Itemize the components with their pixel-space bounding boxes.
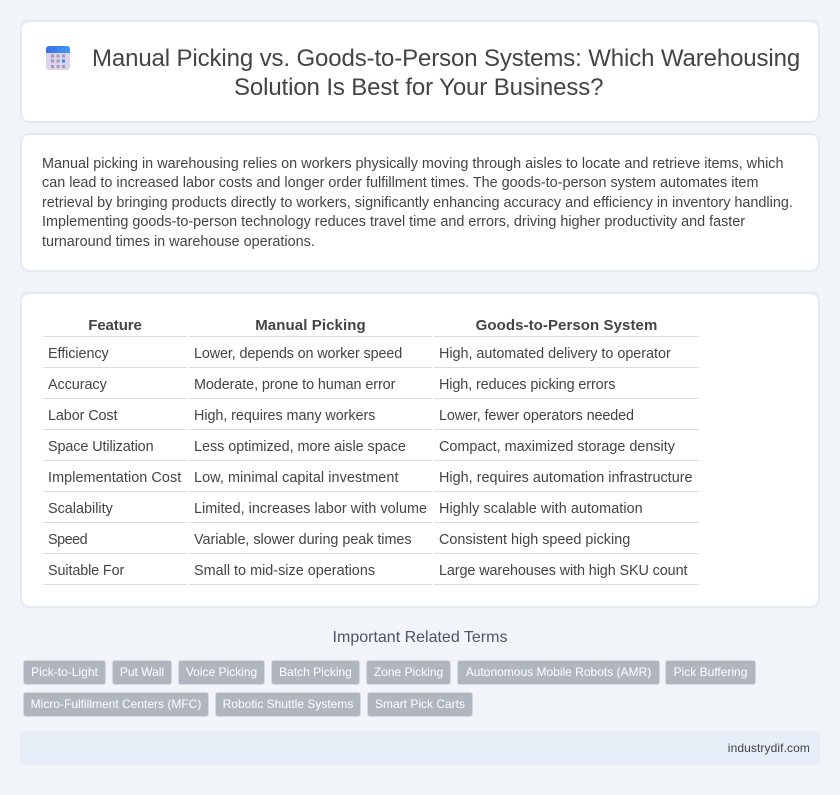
comparison table: Variable, slower during peak times	[194, 532, 412, 548]
comparison table: Large warehouses with high SKU count	[439, 563, 687, 579]
footer bar	[20, 731, 820, 765]
comparison table: Lower, depends on worker speed	[194, 346, 402, 362]
tag list: related terms: Robotic Shuttle Systems	[223, 697, 353, 711]
comparison table: Moderate, prone to human error	[194, 377, 395, 393]
comparison table: Limited, increases labor with volume	[194, 501, 427, 517]
title: Manual Picking vs. Goods-to-Person Systems: Which Warehousing	[92, 45, 800, 72]
comparison table: Compact, maximized storage density	[439, 439, 675, 455]
comparison table: High, requires many workers	[194, 408, 375, 424]
comparison table: Speed	[48, 532, 87, 548]
comparison table: Space Utilization	[48, 439, 154, 455]
comparison table: Small to mid-size operations	[194, 563, 375, 579]
table header row	[88, 317, 657, 334]
comparison table: Consistent high speed picking	[439, 532, 630, 548]
comparison table: High, requires automation infrastructure	[439, 470, 693, 486]
comparison table: Labor Cost	[48, 408, 117, 424]
tag list: related terms	[23, 660, 756, 717]
tag list: related terms: Put Wall	[120, 665, 164, 679]
comparison table	[43, 317, 699, 585]
table header row: Manual Picking	[255, 317, 366, 334]
comparison table: Accuracy	[48, 377, 107, 393]
tag list: related terms: Autonomous Mobile Robots (AMR)	[466, 665, 651, 679]
tag list: related terms: Batch Picking	[279, 665, 352, 679]
panel: introduction	[20, 133, 820, 272]
text block: introduction	[42, 156, 793, 250]
comparison table: Less optimized, more aisle space	[194, 439, 406, 455]
text block: introduction: turnaround times in warehouse operations.	[42, 234, 315, 250]
comparison table: Implementation Cost	[48, 470, 181, 486]
tag list: related terms: Zone Picking	[374, 665, 443, 679]
comparison table: Highly scalable with automation	[439, 501, 643, 517]
heading: important related terms: Important Related Terms	[333, 629, 507, 646]
text block: introduction: Implementing goods-to-person technology reduces travel time and errors, driving higher productivity and faster	[42, 214, 745, 230]
text block: introduction: Manual picking in warehousing relies on workers physically moving through aisles to locate and retrieve items, which	[42, 156, 783, 172]
comparison table: High, automated delivery to operator	[439, 346, 671, 362]
comparison table: Scalability	[48, 501, 113, 517]
title	[92, 45, 800, 101]
tag list: related terms: Pick Buffering	[674, 665, 747, 679]
comparison table: Suitable For	[48, 563, 124, 579]
comparison table: Lower, fewer operators needed	[439, 408, 634, 424]
panel: comparison table	[20, 292, 820, 608]
footer source text: industrydif.com	[728, 741, 810, 755]
panel: header	[20, 20, 820, 123]
tag list: related terms: Micro-Fulfillment Centers (MFC)	[31, 697, 201, 711]
icon: calendar grid	[46, 46, 70, 70]
table header row: Feature	[88, 317, 142, 334]
text block: introduction: retrieval by bringing products directly to workers, significantly enhancing accuracy and efficiency in inventory handling.	[42, 195, 793, 211]
tag list: related terms: Pick-to-Light	[31, 665, 98, 679]
comparison table: Low, minimal capital investment	[194, 470, 399, 486]
comparison table: High, reduces picking errors	[439, 377, 615, 393]
tag list: related terms: Smart Pick Carts	[375, 697, 465, 711]
table header row: Goods-to-Person System	[476, 317, 657, 334]
text block: introduction: can lead to increased labor costs and longer order fulfillment times. The goods-to-person system automates item	[42, 175, 758, 191]
comparison table: Efficiency	[48, 346, 109, 362]
tag list: related terms: Voice Picking	[186, 665, 257, 679]
title: Solution Is Best for Your Business?	[234, 74, 603, 101]
